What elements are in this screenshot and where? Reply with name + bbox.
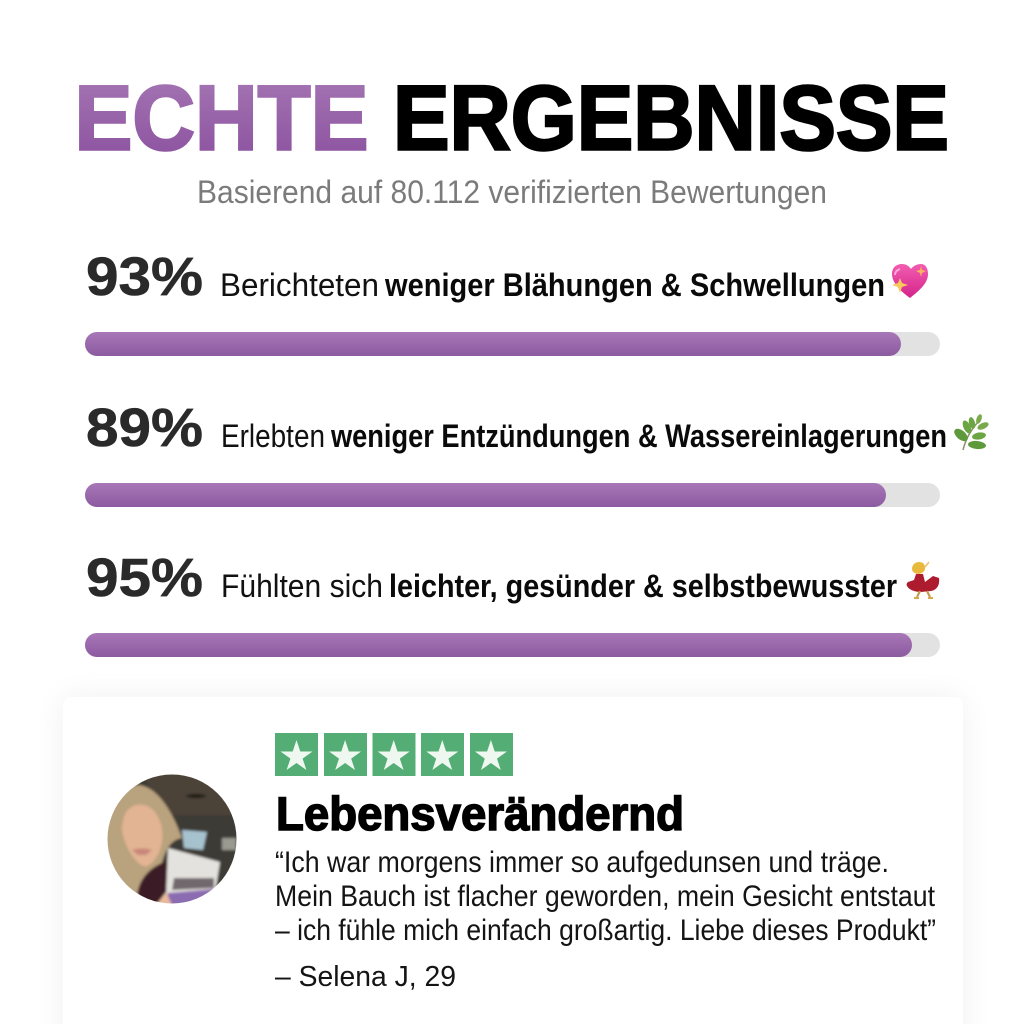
stat value: 95%: 95% xyxy=(86,548,203,608)
stat description: weniger Blähungen & Schwellungen xyxy=(384,267,885,303)
trustpilot stars xyxy=(275,733,513,776)
review quote: – ich fühle mich einfach großartig. Liebe dieses Produkt” xyxy=(275,914,936,947)
subtitle: Basierend auf 80.112 verifizierten Bewertungen xyxy=(197,174,827,210)
stat description: leichter, gesünder & selbstbewusster xyxy=(389,568,897,604)
stat value: 93%: 93% xyxy=(86,247,203,307)
title xyxy=(74,68,949,170)
icon: dancer xyxy=(907,562,939,598)
stat description xyxy=(221,568,897,604)
review heading: Lebensverändernd xyxy=(276,787,684,840)
review author: – Selena J, 29 xyxy=(275,961,456,993)
progress bar: 93% xyxy=(85,332,940,356)
stat description: Fühlten sich xyxy=(221,568,383,604)
stat value: 89%: 89% xyxy=(86,398,203,458)
review quote: “Ich war morgens immer so aufgedunsen und träge. xyxy=(275,846,889,879)
title: ECHTE xyxy=(74,68,368,170)
avatar photo xyxy=(108,774,236,904)
stat row: 89% xyxy=(85,398,990,507)
review quote: Mein Bauch ist flacher geworden, mein Gesicht entstaut xyxy=(275,880,935,913)
title: ERGEBNISSE xyxy=(393,68,949,170)
progress bar: 95% xyxy=(85,633,940,657)
stat row: 93% xyxy=(85,247,940,356)
stat description xyxy=(220,267,885,303)
stat description: Erlebten xyxy=(221,418,325,454)
progress bar: 89% xyxy=(85,483,940,507)
review quote xyxy=(275,846,936,947)
icon: sparkling heart xyxy=(892,264,928,298)
panel: testimonial card xyxy=(63,697,963,1024)
icon: herb xyxy=(952,413,990,450)
stat row: 95% xyxy=(85,548,940,657)
stat description: Berichteten xyxy=(220,267,379,303)
